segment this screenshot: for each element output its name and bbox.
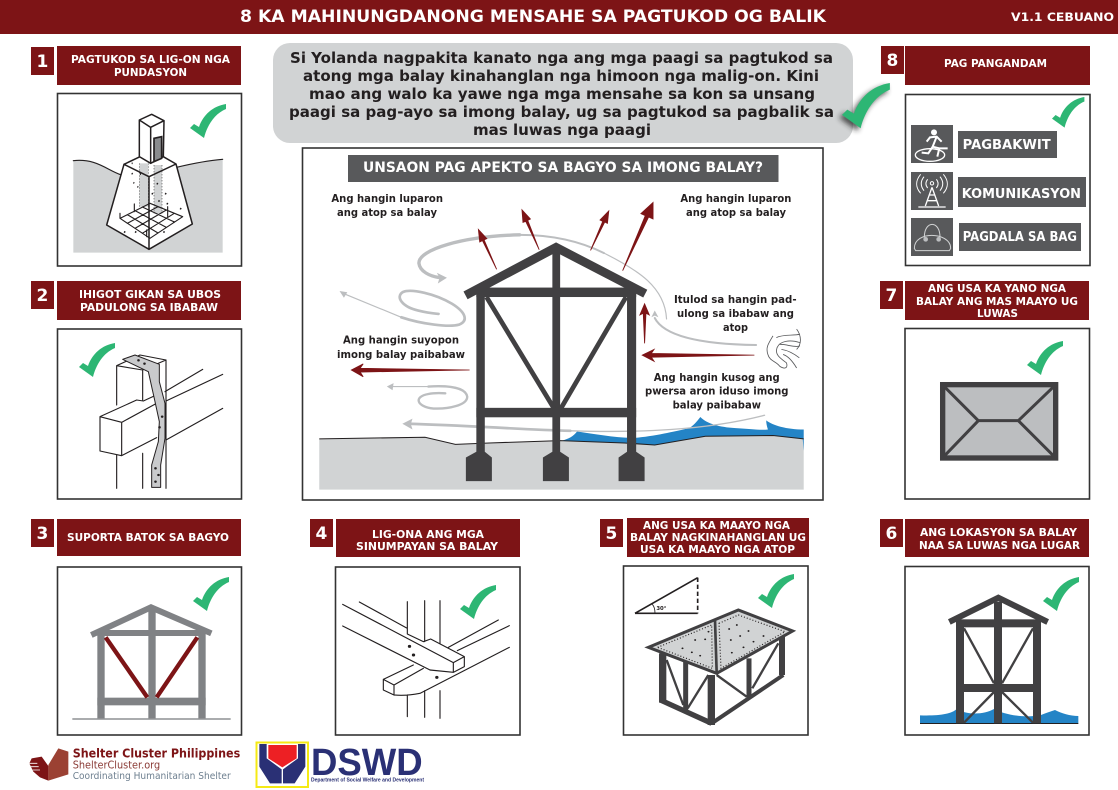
label: wind sucks house: imong balay paibabaw — [337, 349, 465, 361]
panel: 4 strong joints: LIG-ONA ANG MGA — [372, 529, 485, 541]
label: uplift left: Ang hangin luparon — [331, 193, 443, 205]
panel: 5 good roof — [600, 518, 809, 735]
intro speech bubble: Si Yolanda nagpakita kanato nga ang mga paagi sa pagtukod sa — [290, 49, 833, 67]
logo: DSWD: DSWD — [311, 742, 423, 784]
panel: 8 preparedness — [881, 46, 1090, 266]
panel: 1 strong foundation: 1 — [36, 52, 48, 72]
panel: 5 good roof: USA KA MAAYO NGA ATOP — [640, 544, 795, 556]
header bar — [0, 0, 1118, 34]
panel: 5 good roof: 5 — [606, 524, 617, 544]
header bar: 8 KA MAHINUNGDANONG MENSAHE SA PAGTUKOD OG BALIK — [240, 7, 827, 26]
panel: 5 good roof: BALAY NAGKINAHANGLAN UG — [630, 532, 806, 544]
label: uplift right — [680, 193, 791, 219]
panel: 7 simple house shape: ANG USA KA YANO NGA — [928, 283, 1067, 295]
label: strong wind pushes house — [645, 372, 788, 412]
panel: 3 storm bracing — [31, 519, 242, 735]
panel: 6 safe location: NAA SA LUWAS NGA LUGAR — [919, 540, 1080, 552]
panel: 2 tie from bottom to top: PADULONG SA IBABAW — [80, 302, 218, 314]
intro speech bubble: atong mga balay kinahanglan nga himoon nga malig-on. Kini — [303, 67, 819, 85]
label: uplift right: ang atop sa balay — [686, 207, 786, 219]
gray wind paths — [340, 235, 765, 431]
diagram: house in wind — [319, 202, 804, 490]
logo: Shelter Cluster Philippines: Shelter Cluster Philippines — [73, 746, 240, 760]
header bar: V1.1 CEBUANO — [1011, 10, 1114, 24]
panel: 2 tie from bottom to top: 2 — [36, 286, 48, 306]
panel: 7 simple house shape: 7 — [886, 286, 897, 306]
panel: 4 strong joints — [310, 519, 520, 735]
panel: 7 simple house shape: BALAY ANG MAS MAAYO UG — [916, 296, 1078, 308]
panel: 1 strong foundation: PUNDASYON — [114, 67, 187, 79]
label: evacuation — [958, 131, 1057, 158]
label: uplift left — [331, 193, 443, 219]
label: uplift right: Ang hangin luparon — [680, 193, 791, 205]
icon: evacuation runner — [911, 125, 953, 163]
label: wind sucks house: Ang hangin suyopon — [343, 334, 459, 346]
label: uplift left: ang atop sa balay — [337, 207, 437, 219]
label: carry a bag — [959, 223, 1081, 251]
logo: Shelter Cluster Philippines: Coordinating Humanitarian Shelter — [73, 771, 231, 782]
label: strong wind pushes house: Ang hangin kusog ang — [654, 372, 780, 384]
panel: 7 simple house shape: LUWAS — [977, 308, 1018, 320]
panel: 2 tie from bottom to top — [31, 281, 242, 499]
label: wind pushes up to roof — [674, 294, 797, 334]
panel: 5 good roof: ANG USA KA MAAYO NGA — [643, 520, 791, 532]
label: strong wind pushes house: balay paibabaw — [673, 400, 761, 412]
panel: 3 storm bracing: 3 — [36, 524, 48, 544]
panel: 7 simple house shape — [880, 281, 1090, 499]
icon: go bag — [911, 218, 953, 256]
panel: 6 safe location — [880, 519, 1089, 735]
label: wind pushes up to roof: atop — [723, 322, 748, 334]
panel: 3 storm bracing: SUPORTA BATOK SA BAGYO — [67, 532, 229, 544]
label: communication: KOMUNIKASYON — [962, 187, 1081, 202]
label: wind pushes up to roof: Itulod sa hangin pad- — [674, 294, 797, 306]
intro speech bubble: paagi sa pag-ayo sa imong balay, ug sa pagtukod sa pagbalik sa — [289, 103, 834, 121]
diagram heading — [348, 155, 778, 182]
label: strong wind pushes house: pwersa aron iduso imong — [645, 386, 788, 398]
intro speech bubble: mas luwas nga paagi — [473, 121, 651, 139]
intro speech bubble: mao ang walo ka yawe nga mga mensahe sa kon sa unsang — [309, 85, 815, 103]
panel: 4 strong joints: SINUMPAYAN SA BALAY — [356, 541, 498, 553]
logo: DSWD: Department of Social Welfare and Development — [311, 778, 424, 784]
red pressure arrows — [351, 202, 754, 377]
bubble green check mark — [839, 83, 890, 131]
label: wind pushes up to roof: ulong sa ibabaw ang — [677, 308, 794, 320]
panel: 6 safe location: ANG LOKASYON SA BALAY — [920, 527, 1077, 539]
panel: 1 strong foundation — [31, 46, 242, 266]
panel: 6 safe location: 6 — [886, 524, 897, 544]
panel: 1 strong foundation: PAGTUKOD SA LIG-ON NGA — [71, 54, 231, 66]
label: carry a bag: PAGDALA SA BAG — [963, 230, 1077, 245]
icon: radio tower — [911, 172, 953, 210]
icon: wind face — [767, 329, 800, 368]
logo: Shelter Cluster Philippines — [29, 746, 240, 782]
logo: Shelter Cluster Philippines: ShelterCluster.org — [73, 760, 160, 772]
panel: 8 preparedness: PAG PANGANDAM — [944, 58, 1047, 70]
house frame — [466, 246, 645, 481]
label: wind sucks house — [337, 334, 465, 361]
logo: DSWD — [256, 742, 424, 787]
panel: 2 tie from bottom to top: IHIGOT GIKAN SA UBOS — [79, 289, 221, 301]
label: communication — [958, 177, 1086, 207]
panel: 5 good roof: 30° — [656, 606, 667, 612]
diagram heading: UNSAON PAG APEKTO SA BAGYO SA IMONG BALAY? — [363, 160, 763, 176]
label: evacuation: PAGBAKWIT — [963, 138, 1051, 153]
panel: how a typhoon affects your house — [302, 148, 823, 500]
panel: 8 preparedness: 8 — [886, 51, 898, 71]
panel: 4 strong joints: 4 — [316, 524, 328, 544]
intro speech bubble — [273, 43, 853, 143]
